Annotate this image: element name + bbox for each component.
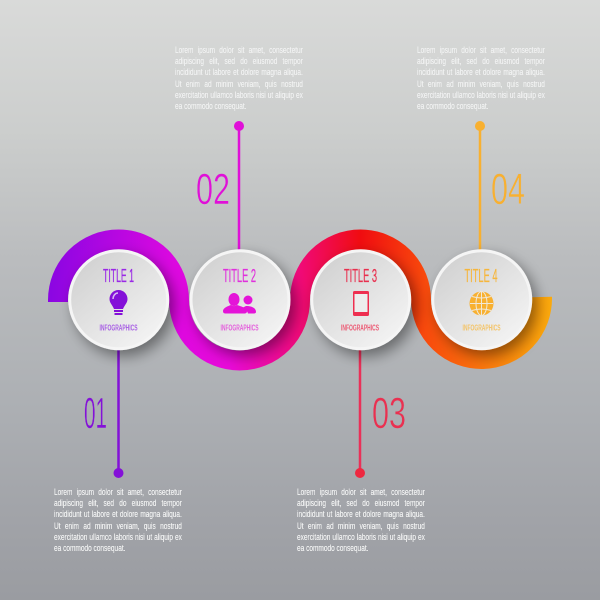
text block 3: adipiscing elit, sed do eiusmod tempor — [297, 498, 425, 509]
connector line 2 with dot — [234, 121, 244, 255]
text block 1: exercitation ullamco laboris nisi ut aliquip ex — [54, 532, 182, 543]
text block 2: exercitation ullamco laboris nisi ut aliquip ex — [175, 90, 303, 101]
step 4 title: TITLE 4 — [464, 266, 498, 286]
text block 4: adipiscing elit, sed do eiusmod tempor — [417, 56, 545, 67]
step 1 caption: INFOGRAPHICS — [100, 324, 138, 332]
connector line 1 with dot — [114, 345, 124, 478]
text block 4: exercitation ullamco laboris nisi ut aliquip ex — [417, 90, 545, 101]
number 02: 02 — [196, 165, 230, 214]
step 1 disc: TITLE 1 — [103, 266, 134, 286]
step 3 disc — [312, 251, 410, 349]
step 2 title: TITLE 2 — [223, 266, 256, 286]
icon: people — [223, 293, 256, 314]
text block 2: Lorem ipsum dolor sit amet, consectetur — [175, 45, 303, 56]
text block 1: ea commodo consequat. — [54, 543, 125, 554]
text block 3 — [297, 487, 425, 554]
text block 3: incididunt ut labore et dolore magna aliqua. — [297, 509, 425, 520]
connector line 4 with dot — [475, 121, 485, 255]
step 3 caption: INFOGRAPHICS — [341, 324, 379, 332]
text block 4: Ut enim ad minim veniam, quis nostrud — [417, 79, 545, 90]
text block 4 — [417, 45, 545, 112]
icon: globe — [470, 292, 494, 316]
wavy gradient ribbon — [58, 239, 542, 360]
text block 1: adipiscing elit, sed do eiusmod tempor — [54, 498, 182, 509]
text: 01 — [84, 389, 107, 438]
step 3 title: TITLE 3 — [344, 266, 377, 286]
text block 3: Ut enim ad minim veniam, quis nostrud — [297, 521, 425, 532]
number 04: 04 — [491, 165, 525, 214]
step 1 disc — [70, 251, 168, 349]
text block 2 — [175, 45, 303, 112]
text block 1: Ut enim ad minim veniam, quis nostrud — [54, 521, 182, 532]
text block 1: incididunt ut labore et dolore magna aliqua. — [54, 509, 182, 520]
step 2 caption: INFOGRAPHICS — [220, 324, 259, 332]
text block 3: exercitation ullamco laboris nisi ut aliquip ex — [297, 532, 425, 543]
number 03: 03 — [372, 389, 406, 438]
text block 1 — [54, 487, 182, 554]
step 2 disc — [191, 251, 289, 349]
text block 4: incididunt ut labore et dolore magna aliqua. — [417, 67, 545, 78]
icon: light bulb — [110, 290, 128, 315]
text block 2: ea commodo consequat. — [175, 101, 246, 112]
text block 4: Lorem ipsum dolor sit amet, consectetur — [417, 45, 545, 56]
text block 3: ea commodo consequat. — [297, 543, 368, 554]
text block 2: Ut enim ad minim veniam, quis nostrud — [175, 79, 303, 90]
step 4 caption: INFOGRAPHICS — [462, 324, 501, 332]
text block 2: adipiscing elit, sed do eiusmod tempor — [175, 56, 303, 67]
text block 1: Lorem ipsum dolor sit amet, consectetur — [54, 487, 182, 498]
step 4 disc — [433, 251, 531, 349]
text block 2: incididunt ut labore et dolore magna aliqua. — [175, 67, 303, 78]
connector line 3 with dot — [355, 345, 365, 478]
text block 3: Lorem ipsum dolor sit amet, consectetur — [297, 487, 425, 498]
icon: tablet — [353, 291, 369, 316]
text block 4: ea commodo consequat. — [417, 101, 488, 112]
